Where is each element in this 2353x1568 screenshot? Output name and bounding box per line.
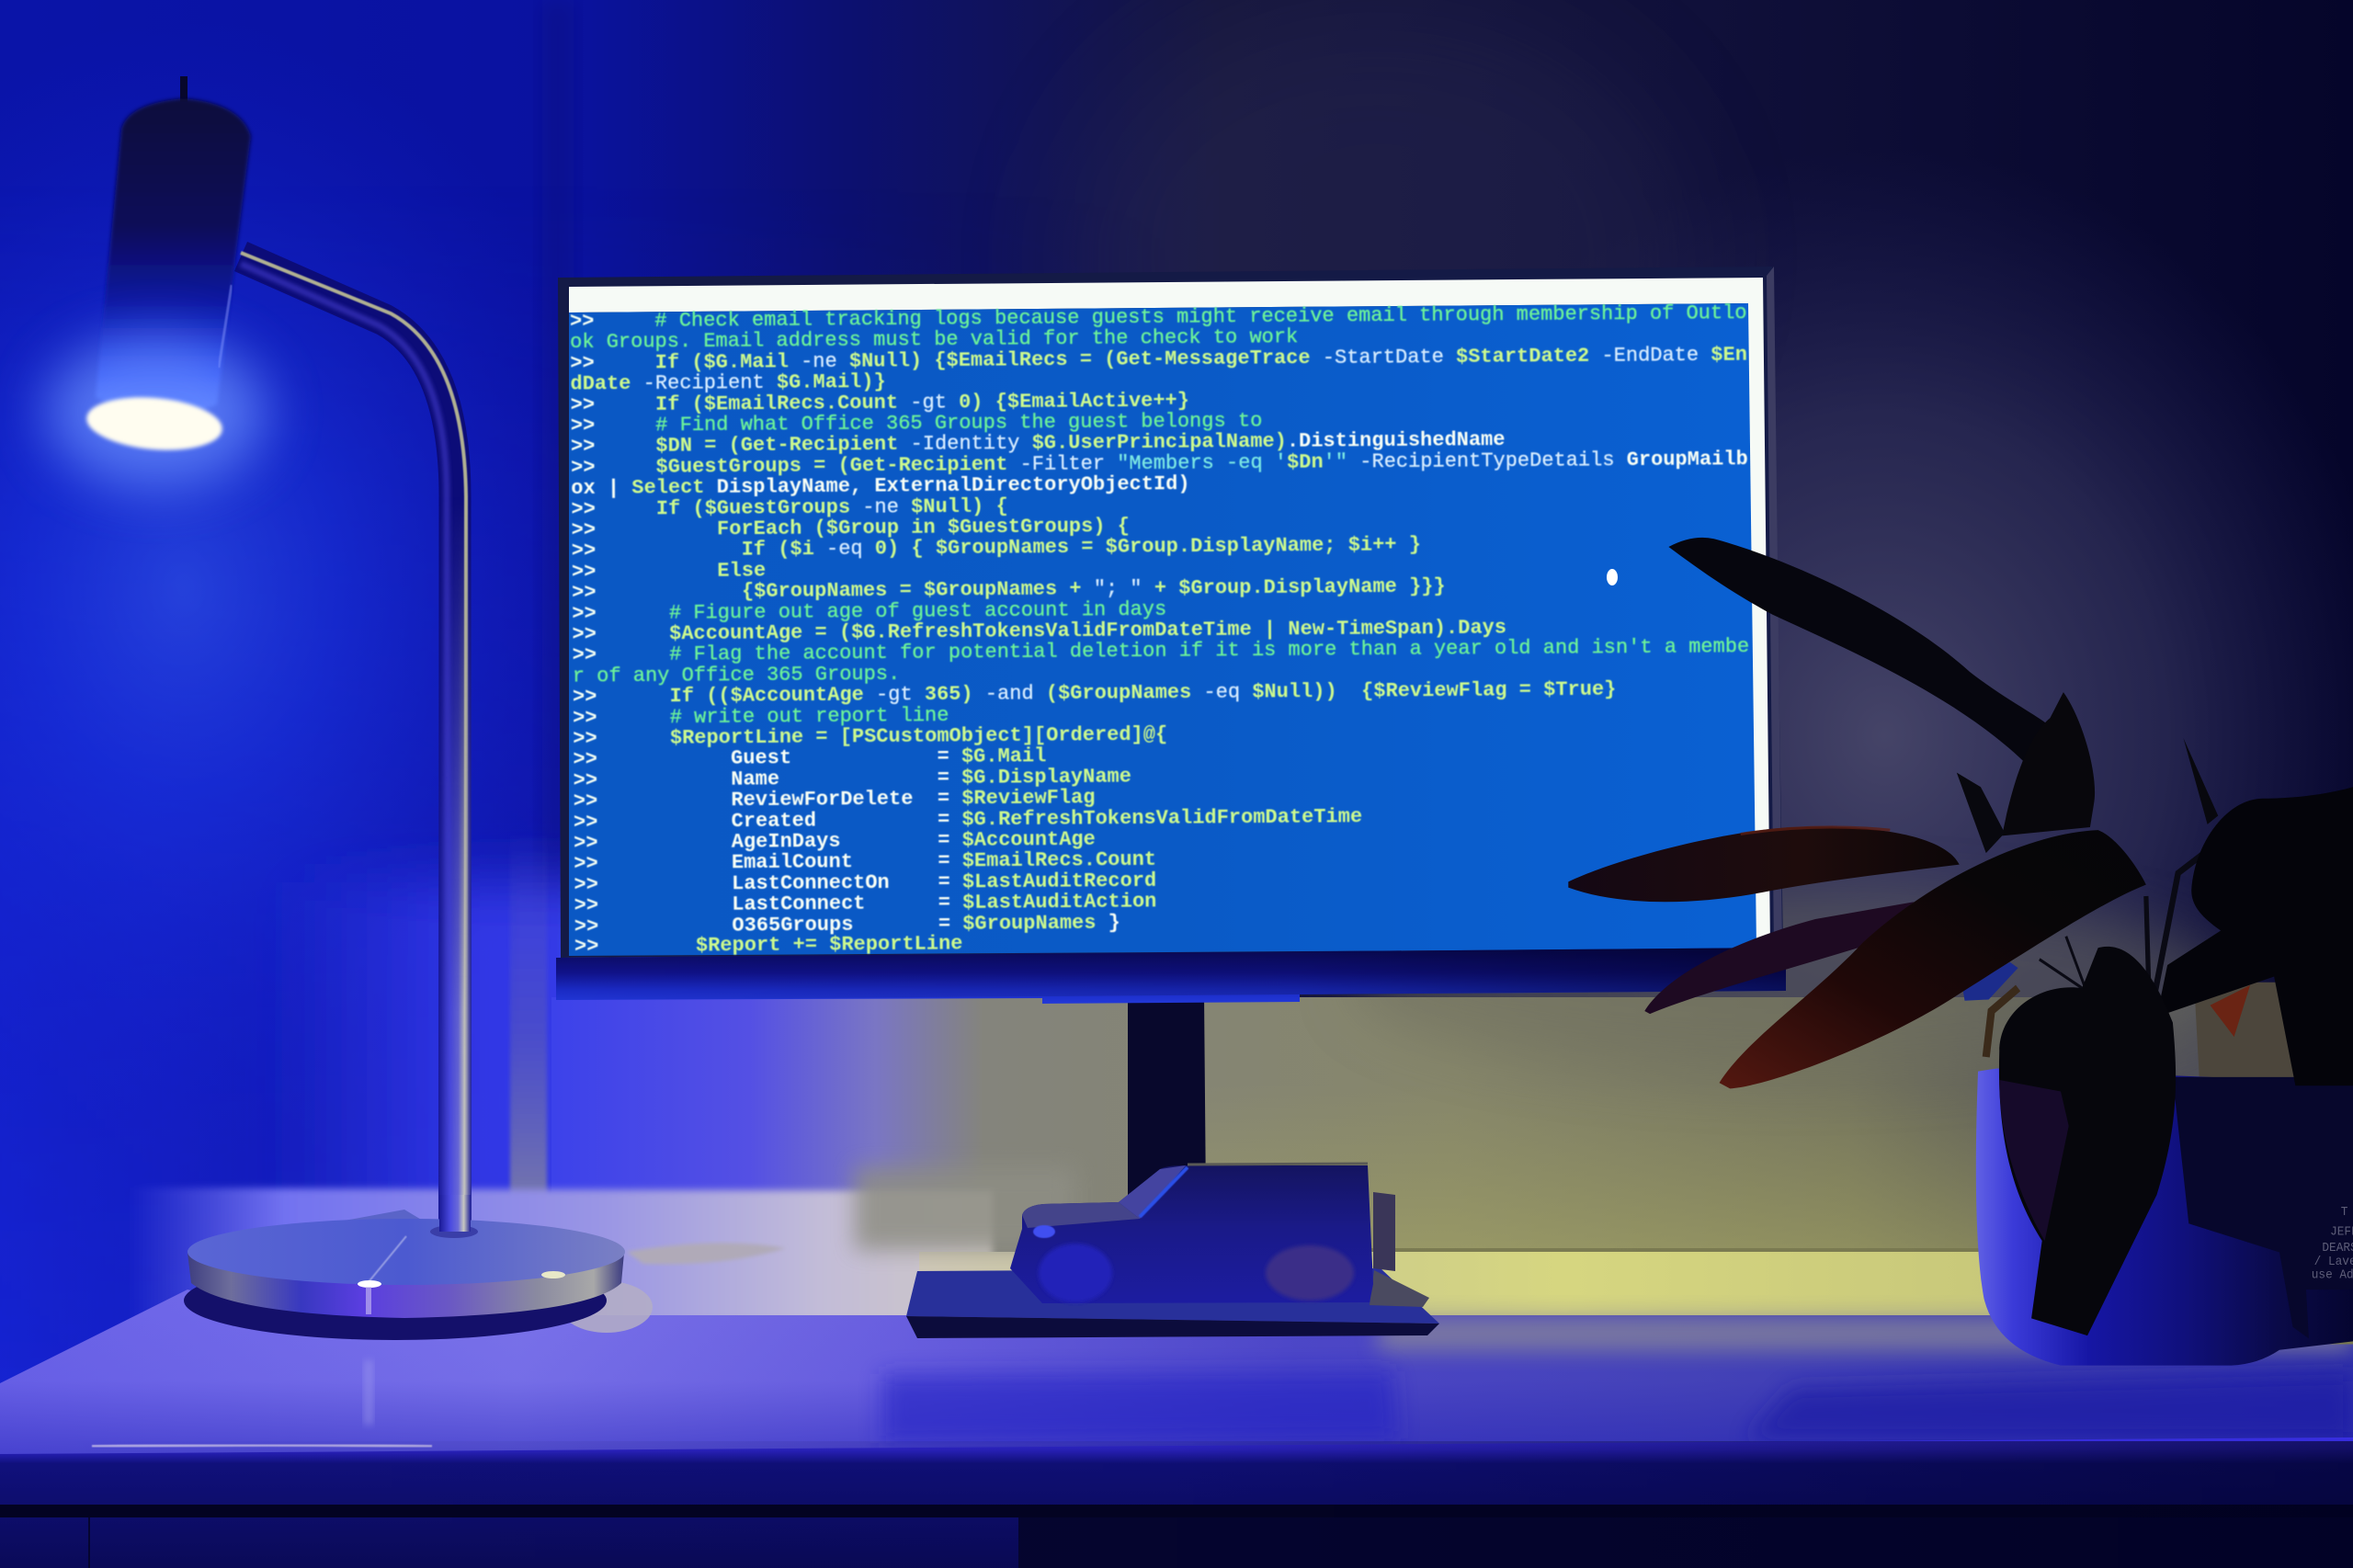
lamp shade bbox=[96, 98, 251, 416]
console code text: >> If ($G.Mail -ne $Null) {$EmailRecs = (Get-MessageTrace -StartDate $StartDate2 -EndDate $En bbox=[570, 344, 1747, 375]
console code text: >> ReviewForDelete = $ReviewFlag bbox=[574, 786, 1096, 813]
console code text: >> AgeInDays = $AccountAge bbox=[574, 828, 1096, 855]
orange leaf fragment bbox=[2211, 985, 2250, 1037]
tall spike leaf bbox=[2184, 738, 2218, 824]
console code text: >> # Flag the account for potential deletion if it is more than a year old and isn't a membe bbox=[573, 635, 1749, 667]
console code text: >> $DN = (Get-Recipient -Identity $G.UserPrincipalName).DistinguishedName bbox=[571, 428, 1506, 459]
right leaf mass bbox=[2156, 787, 2353, 1085]
mouse cursor bbox=[1607, 569, 1618, 585]
purple lower leaf bbox=[1644, 902, 1914, 1014]
console code text: >> If ($EmailRecs.Count -gt 0) {$EmailActive++} bbox=[571, 389, 1189, 416]
pole shadow on wall bbox=[510, 827, 547, 1222]
console code text: >> $ReportLine = [PSCustomObject][Ordered]@{ bbox=[573, 723, 1167, 750]
console code text: >> LastConnectOn = $LastAuditRecord bbox=[574, 869, 1156, 896]
desk lamp bbox=[46, 76, 653, 1340]
car spare wheel bbox=[1373, 1192, 1395, 1271]
thin stems bbox=[2040, 845, 2215, 1011]
car windshield bbox=[1119, 1165, 1186, 1219]
cream light patch on ledge bbox=[627, 1243, 786, 1264]
top arching leaf bbox=[1668, 538, 2050, 761]
care label text bbox=[2312, 1204, 2353, 1282]
background through leaves bbox=[2194, 983, 2295, 1080]
car roof edge bbox=[1188, 1164, 1368, 1165]
monitor stand neck bbox=[1128, 993, 1206, 1204]
large center leaf bbox=[1720, 830, 2146, 1088]
lamp shade pin bbox=[180, 76, 188, 113]
plate bbox=[906, 1268, 1439, 1338]
dry stems bbox=[1986, 988, 2018, 1057]
care label text: T bbox=[2341, 1204, 2347, 1219]
purple underside of hanging leaf bbox=[1999, 1080, 2069, 1241]
monitor bbox=[556, 267, 1786, 1204]
car pillar highlight bbox=[1140, 1167, 1188, 1217]
console code text: >> $Report += $ReportLine bbox=[574, 932, 963, 958]
back ledge bbox=[129, 1167, 2353, 1324]
console code text bbox=[570, 301, 1752, 958]
console code text: >> O365Groups = $GroupNames } bbox=[574, 911, 1120, 938]
car body bbox=[1010, 1165, 1373, 1303]
console code text: >> $AccountAge = ($G.RefreshTokensValidFromDateTime | New-TimeSpan).Days bbox=[572, 617, 1506, 646]
console code text: >> EmailCount = $EmailRecs.Count bbox=[574, 848, 1156, 876]
blue fragment bbox=[1962, 962, 2018, 1001]
console code text: >> Created = $G.RefreshTokensValidFromDateTime bbox=[574, 805, 1362, 834]
monitor bezel bbox=[558, 267, 1783, 958]
console code text: >> ForEach ($Group in $GuestGroups) { bbox=[572, 515, 1130, 541]
monitor right edge bbox=[1767, 267, 1782, 950]
console code text: >> If (($AccountAge -gt 365) -and ($GroupNames -eq $Null)) {$ReviewFlag = $True} bbox=[573, 678, 1616, 709]
screen title bar bbox=[569, 278, 1770, 950]
console code text: ok Groups. Email address must be valid for the check to work bbox=[570, 325, 1298, 354]
console code text: >> # Find what Office 365 Groups the guest belongs to bbox=[571, 409, 1262, 437]
stem entering the base bbox=[439, 1195, 471, 1232]
console code text: >> {$GroupNames = $GroupNames + "; " + $Group.DisplayName }}} bbox=[572, 575, 1446, 605]
console code text: >> If ($GuestGroups -ne $Null) { bbox=[571, 494, 1008, 521]
desk front and drawers bbox=[0, 1437, 2353, 1568]
console code text: >> If ($i -eq 0) { $GroupNames = $Group.DisplayName; $i++ } bbox=[572, 533, 1421, 562]
console code text: >> # Figure out age of guest account in days bbox=[572, 598, 1166, 625]
console code text: >> Else bbox=[572, 559, 766, 584]
lit lower wall below the monitor bbox=[551, 892, 2353, 1264]
plant in pot bbox=[1568, 538, 2353, 1366]
console code text: ox | Select DisplayName, ExternalDirectoryObjectId) bbox=[571, 472, 1190, 500]
console code text: >> LastConnect = $LastAuditAction bbox=[574, 890, 1156, 917]
blue wall left of the monitor bbox=[276, 882, 643, 1232]
screen blue console bbox=[569, 303, 1756, 956]
lamp glow bbox=[46, 338, 267, 485]
console code text: >> Guest = $G.Mail bbox=[573, 744, 1046, 771]
toy car figurine on plate bbox=[906, 1164, 1439, 1338]
console code text: >> Name = $G.DisplayName bbox=[574, 765, 1131, 792]
car hood bbox=[1022, 1202, 1140, 1228]
rear wheel arch bbox=[1266, 1245, 1354, 1301]
console code text: >> $GuestGroups = (Get-Recipient -Filter "Members -eq '$Dn'" -RecipientTypeDetails GroupMailb bbox=[571, 448, 1748, 479]
front wheel arch bbox=[1039, 1244, 1112, 1302]
monitor chin bbox=[556, 948, 1786, 1004]
lamp base bbox=[184, 1210, 653, 1340]
center upright leaf bbox=[2002, 692, 2095, 835]
pot shadow block bbox=[2173, 1077, 2353, 1338]
console code text: >> # write out report line bbox=[573, 704, 949, 730]
pot bbox=[1976, 1068, 2353, 1366]
desk top bbox=[0, 1290, 2353, 1456]
small spike leaf bbox=[1957, 773, 2005, 853]
console code text: >> # Check email tracking logs because guests might receive email through membership of Outlo bbox=[570, 301, 1747, 333]
horizontal leaf bbox=[1568, 826, 1960, 902]
console code text: r of any Office 365 Groups. bbox=[573, 663, 900, 687]
console code text: dDate -Recipient $G.Mail)} bbox=[570, 370, 886, 396]
lamp shade edge highlight bbox=[219, 285, 232, 368]
hanging front leaf bbox=[1999, 947, 2176, 1335]
olive wall behind pot right bbox=[2279, 1287, 2353, 1344]
lamp bulb bbox=[85, 392, 224, 455]
car headlight bbox=[1033, 1225, 1055, 1238]
lamp arm and pole bbox=[241, 253, 472, 1232]
